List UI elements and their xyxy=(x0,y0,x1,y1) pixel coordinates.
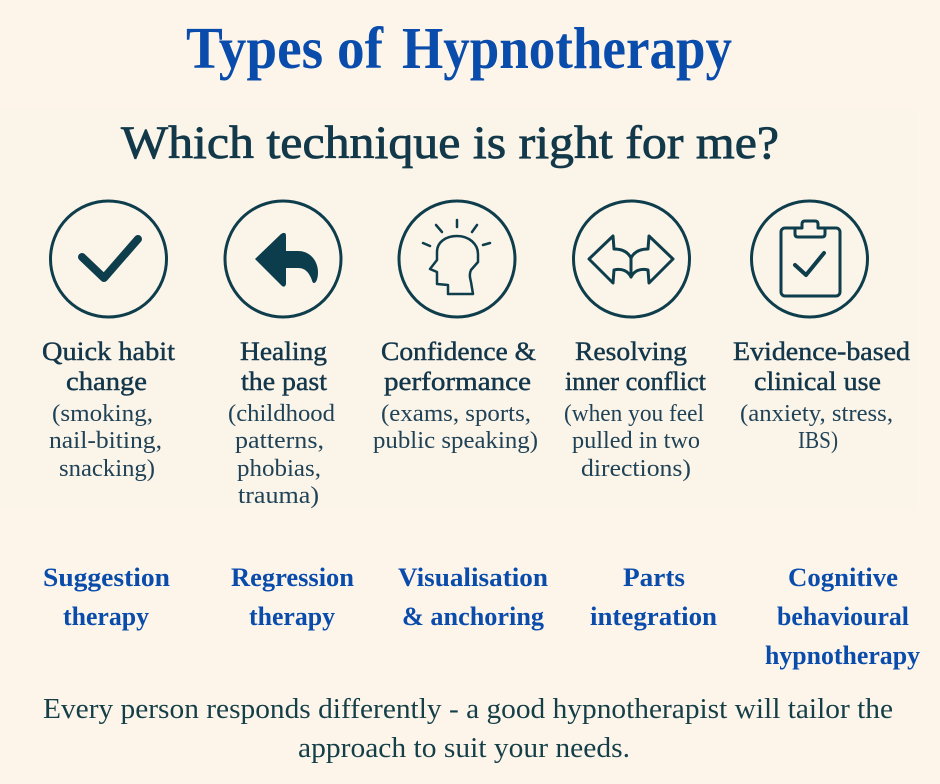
label: regression therapy: therapy xyxy=(249,602,335,631)
panel: quick habit change xyxy=(42,201,176,482)
label: visualisation and anchoring: & anchoring xyxy=(402,602,544,631)
text: past examples: (childhood xyxy=(228,401,335,427)
text: past examples: trauma) xyxy=(238,483,319,509)
icon: check mark xyxy=(50,201,166,317)
label: cognitive behavioural hypnotherapy xyxy=(765,563,920,670)
text: conflict examples: directions) xyxy=(581,456,691,482)
label: regression therapy xyxy=(231,563,355,631)
label: cognitive behavioural hypnotherapy: behavioural xyxy=(777,602,909,631)
icon: head with light rays xyxy=(399,201,515,317)
heading: confidence and performance: performance xyxy=(384,367,531,396)
label: regression therapy: Regression xyxy=(231,563,355,592)
label: suggestion therapy: Suggestion xyxy=(43,563,171,592)
label: cognitive behavioural hypnotherapy: Cognitive xyxy=(788,563,898,592)
label: parts integration xyxy=(590,563,718,631)
heading: quick habit change: Quick habit xyxy=(42,337,176,366)
heading: quick habit change: change xyxy=(66,367,147,396)
heading: evidence-based clinical use: clinical use xyxy=(754,367,881,396)
text: habit examples: nail-biting, xyxy=(49,428,162,454)
heading: quick habit change xyxy=(42,337,176,396)
panel: confidence and performance xyxy=(373,201,538,454)
text: clinical examples: IBS) xyxy=(798,428,838,454)
text: confidence examples: public speaking) xyxy=(373,428,538,454)
text: conflict examples: (when you feel xyxy=(564,401,704,427)
heading: healing the past: Healing xyxy=(240,337,327,366)
title xyxy=(186,15,732,81)
label: cognitive behavioural hypnotherapy: hypnotherapy xyxy=(765,641,920,670)
text: conflict examples: pulled in two xyxy=(572,428,700,454)
subtitle: Which technique is right for me? xyxy=(121,117,779,169)
heading: resolving inner conflict: Resolving xyxy=(575,337,687,366)
text: habit examples: (smoking, xyxy=(52,401,153,427)
footer note: Every person responds differently - a good hypnotherapist will tailor the xyxy=(43,693,893,725)
heading: resolving inner conflict: inner conflict xyxy=(565,367,707,396)
text: confidence examples: (exams, sports, xyxy=(381,401,531,427)
panel: healing the past xyxy=(225,201,341,509)
heading: evidence-based clinical use xyxy=(733,337,910,396)
heading: confidence and performance xyxy=(381,337,536,396)
panel: resolving inner conflict xyxy=(564,201,707,482)
icon: back arrow xyxy=(225,201,341,317)
icon: clipboard with check xyxy=(752,201,868,317)
heading: evidence-based clinical use: Evidence-based xyxy=(733,337,910,366)
title: Hypnotherapy xyxy=(402,15,732,81)
text: habit examples: snacking) xyxy=(59,456,155,482)
heading: resolving inner conflict xyxy=(565,337,707,396)
text: confidence examples xyxy=(373,401,538,454)
footer note: approach to suit your needs. xyxy=(298,732,630,764)
heading: healing the past: the past xyxy=(241,367,328,396)
icon: opposing arrows xyxy=(574,201,690,317)
label: parts integration: Parts xyxy=(623,563,685,592)
footer note xyxy=(43,693,893,764)
text: clinical examples xyxy=(740,401,893,454)
label: visualisation and anchoring xyxy=(398,563,549,631)
text: past examples: patterns, xyxy=(235,428,324,454)
text: past examples xyxy=(228,401,335,509)
heading: confidence and performance: Confidence & xyxy=(381,337,536,366)
title: Types of xyxy=(186,15,384,81)
heading: healing the past xyxy=(240,337,328,396)
label: parts integration: integration xyxy=(590,602,718,631)
text: clinical examples: (anxiety, stress, xyxy=(740,401,893,427)
label: suggestion therapy xyxy=(43,563,171,631)
text: past examples: phobias, xyxy=(237,456,321,482)
label: suggestion therapy: therapy xyxy=(63,602,149,631)
text: habit examples xyxy=(49,401,162,482)
label: visualisation and anchoring: Visualisation xyxy=(398,563,549,592)
text: conflict examples xyxy=(564,401,704,482)
panel: evidence-based clinical use xyxy=(733,201,910,454)
